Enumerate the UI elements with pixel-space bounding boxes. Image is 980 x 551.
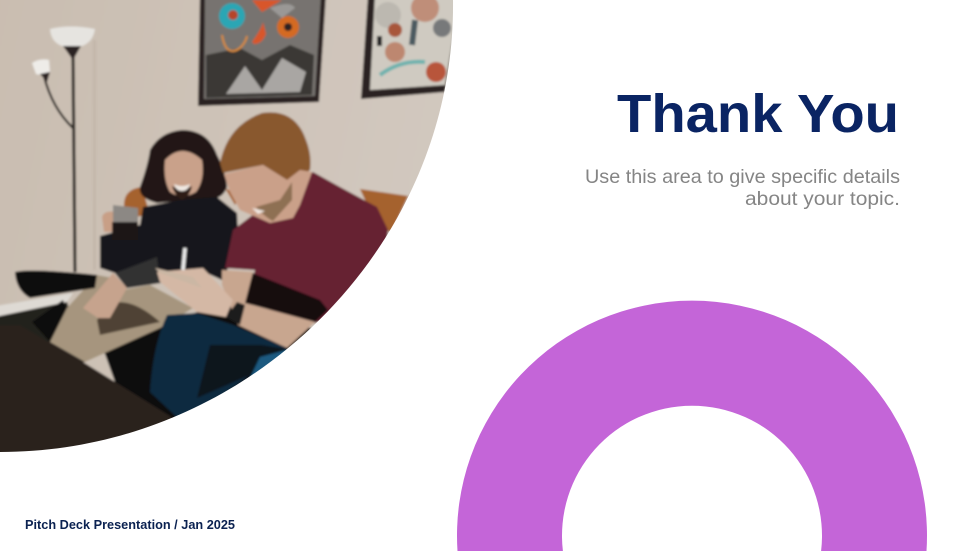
writing hand	[157, 268, 233, 317]
photo: two men on a sofa	[0, 0, 453, 452]
khaki legs	[50, 275, 193, 362]
shoe	[15, 271, 97, 298]
watch	[226, 302, 245, 325]
jeans	[150, 313, 287, 420]
body text: Use this area to give specific details	[585, 166, 900, 188]
frame art 2	[361, 0, 460, 99]
body text	[585, 166, 900, 210]
dark sofa base	[33, 299, 66, 341]
sofa	[124, 187, 150, 218]
man in polo	[225, 172, 388, 326]
floor lamp	[73, 56, 75, 272]
frame art 1	[198, 0, 326, 106]
forearm	[222, 270, 315, 348]
body text: about your topic.	[745, 188, 900, 210]
title: Thank You	[617, 84, 899, 144]
left hand on knee	[83, 273, 127, 318]
man with long hair	[140, 130, 227, 203]
phone and pen	[154, 266, 196, 284]
footer text: Pitch Deck Presentation / Jan 2025	[25, 518, 235, 532]
purple donut shape	[457, 301, 927, 551]
